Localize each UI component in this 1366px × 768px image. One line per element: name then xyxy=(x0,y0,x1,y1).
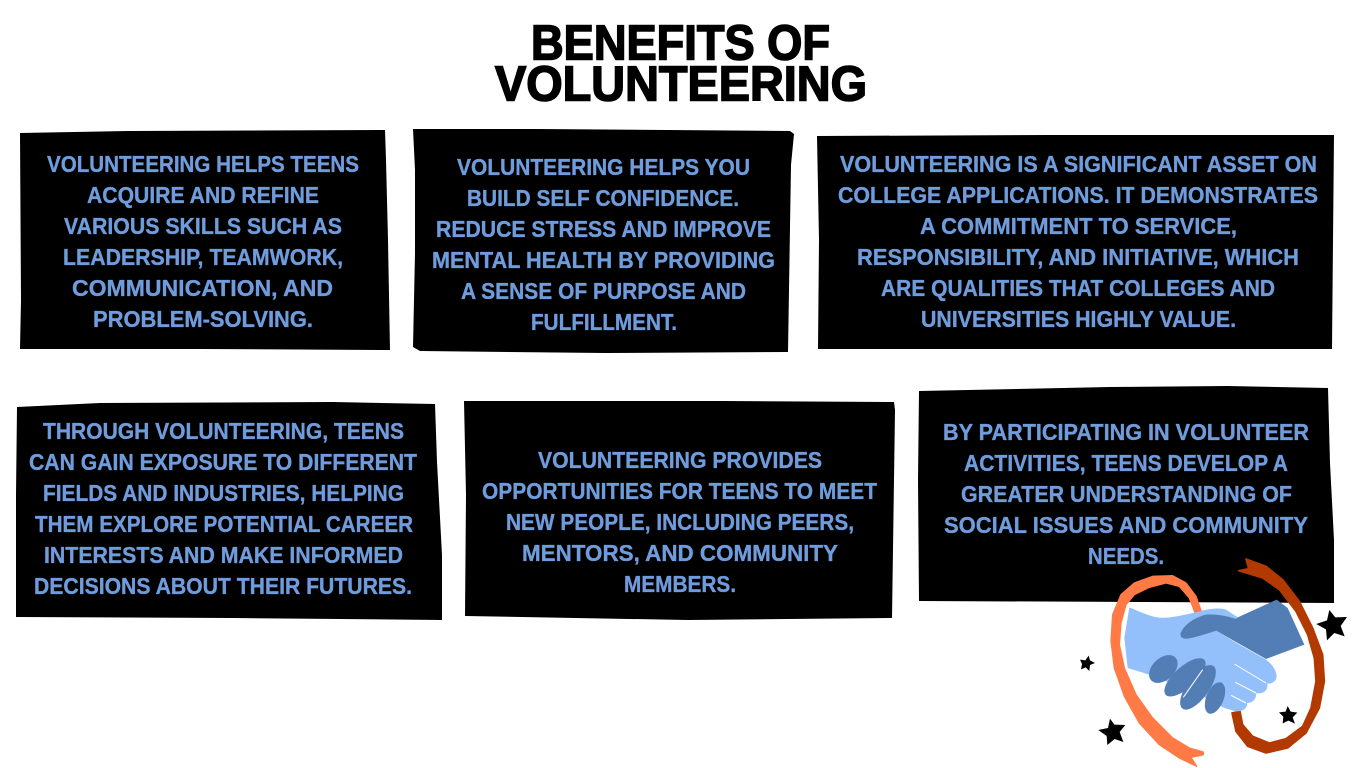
panel: skills: ACQUIRE AND REFINE xyxy=(87,182,319,208)
panel: community understanding: NEEDS. xyxy=(1088,543,1164,569)
panel: career exposure: FIELDS AND INDUSTRIES, HELPING xyxy=(43,480,404,506)
panel: self confidence: A SENSE OF PURPOSE AND xyxy=(461,278,746,304)
icon: red ring xyxy=(1232,559,1324,753)
panel: college applications xyxy=(817,135,1334,349)
title: BENEFITS OF xyxy=(531,16,830,70)
panel: career exposure xyxy=(16,402,442,620)
icon: stars xyxy=(1080,610,1347,745)
panel: skills: VOLUNTEERING HELPS TEENS xyxy=(47,151,359,177)
panel: career exposure: THEM EXPLORE POTENTIAL CAREER xyxy=(35,511,413,537)
panel: community understanding: GREATER UNDERSTANDING OF xyxy=(961,481,1292,507)
panel: meeting new people: VOLUNTEERING PROVIDES xyxy=(538,447,822,473)
panel: meeting new people: MEMBERS. xyxy=(624,571,736,597)
panel: meeting new people: NEW PEOPLE, INCLUDING PEERS, xyxy=(506,509,854,535)
panel: community understanding: BY PARTICIPATING IN VOLUNTEER xyxy=(943,419,1309,445)
panel: career exposure: CAN GAIN EXPOSURE TO DIFFERENT xyxy=(29,449,418,475)
panel: self confidence: REDUCE STRESS AND IMPROVE xyxy=(436,216,771,242)
icon: fingers xyxy=(1144,650,1229,717)
panel: skills: PROBLEM-SOLVING. xyxy=(93,306,313,332)
panel: meeting new people: MENTORS, AND COMMUNITY xyxy=(522,540,838,566)
panel: college applications: VOLUNTEERING IS A SIGNIFICANT ASSET ON xyxy=(840,151,1317,177)
title: VOLUNTEERING xyxy=(495,58,867,112)
panel: meeting new people: OPPORTUNITIES FOR TEENS TO MEET xyxy=(482,478,878,504)
title xyxy=(495,16,867,112)
panel: community understanding: ACTIVITIES, TEENS DEVELOP A xyxy=(964,450,1288,476)
panel: college applications: UNIVERSITIES HIGHLY VALUE. xyxy=(921,306,1236,332)
panel: college applications: ARE QUALITIES THAT COLLEGES AND xyxy=(881,275,1275,301)
panel: community understanding: SOCIAL ISSUES AND COMMUNITY xyxy=(944,512,1308,538)
panel: self confidence: BUILD SELF CONFIDENCE. xyxy=(467,185,739,211)
panel: skills: LEADERSHIP, TEAMWORK, xyxy=(63,244,343,270)
panel: career exposure: INTERESTS AND MAKE INFORMED xyxy=(44,542,403,568)
icon: orange ring xyxy=(1111,576,1203,766)
icon: handshake with rings and stars xyxy=(1080,559,1347,766)
icon: dark thumb xyxy=(1180,614,1238,639)
panel: college applications: RESPONSIBILITY, AND INITIATIVE, WHICH xyxy=(857,244,1299,270)
panel: college applications: COLLEGE APPLICATIONS. IT DEMONSTRATES xyxy=(838,182,1318,208)
panel: self confidence: MENTAL HEALTH BY PROVIDING xyxy=(432,247,775,273)
panel: self confidence xyxy=(413,129,794,353)
panel: college applications: A COMMITMENT TO SERVICE, xyxy=(920,213,1237,239)
icon: light hand xyxy=(1124,607,1277,711)
panel: community understanding xyxy=(918,386,1334,603)
panel: skills xyxy=(20,130,390,350)
panel: skills: VARIOUS SKILLS SUCH AS xyxy=(64,213,342,239)
panel: self confidence: VOLUNTEERING HELPS YOU xyxy=(457,154,750,180)
panel: career exposure: THROUGH VOLUNTEERING, TEENS xyxy=(43,418,404,444)
panel: self confidence: FULFILLMENT. xyxy=(531,309,677,335)
panel: career exposure: DECISIONS ABOUT THEIR FUTURES. xyxy=(34,573,412,599)
panel: skills: COMMUNICATION, AND xyxy=(72,275,333,301)
panel: meeting new people xyxy=(464,401,895,620)
icon: dark hand arm xyxy=(1216,600,1304,659)
